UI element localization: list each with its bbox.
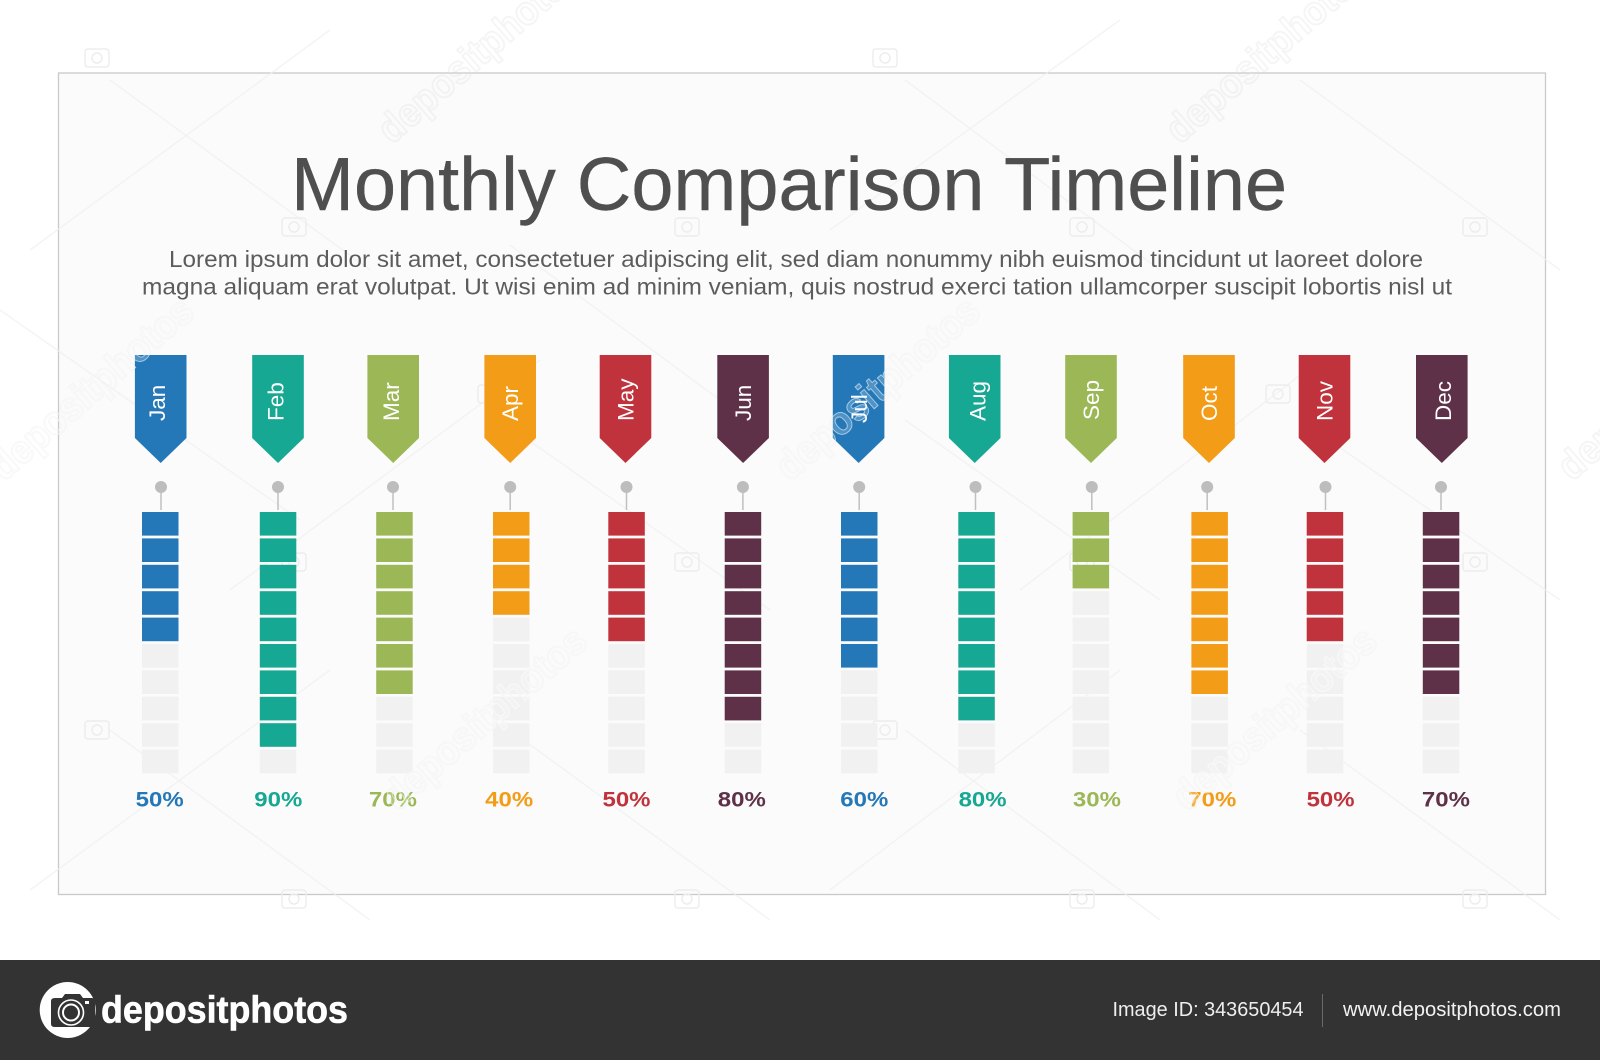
column: January 50% xyxy=(135,355,186,812)
value: Oct: 70% xyxy=(1188,788,1237,812)
pin: Mar xyxy=(387,481,399,510)
flag: Jul: Jul xyxy=(847,394,872,423)
column: June 80% xyxy=(717,355,769,812)
text: depositphotos xyxy=(1164,618,1385,819)
flag: Sep: Sep xyxy=(1079,380,1104,420)
flag: Jan: Jan xyxy=(145,385,170,421)
flag: Jul xyxy=(833,355,884,463)
value: Jun: 80% xyxy=(718,788,766,812)
value: Mar: 70% xyxy=(369,788,417,812)
value: Nov: 50% xyxy=(1307,788,1355,812)
flag: Nov xyxy=(1299,355,1350,463)
flag: Aug xyxy=(949,355,1000,463)
column: May 50% xyxy=(600,355,651,812)
flag: Mar xyxy=(367,355,419,463)
bar: Oct xyxy=(1191,512,1228,773)
pin: Nov xyxy=(1320,481,1332,510)
flag: Feb xyxy=(252,355,304,463)
column: February 90% xyxy=(252,355,304,812)
pin: Jan xyxy=(155,481,167,510)
pin: Jun xyxy=(737,481,749,510)
bar: Sep xyxy=(1073,512,1109,773)
text: depositphotos xyxy=(767,288,988,489)
flag: Dec: Dec xyxy=(1431,381,1456,421)
column: October 70% xyxy=(1183,355,1237,812)
flag: Nov: Nov xyxy=(1312,380,1338,421)
flag: Oct: Oct xyxy=(1197,385,1222,421)
flag: Jun: Jun xyxy=(731,385,756,421)
flag: Mar: Mar xyxy=(379,382,404,421)
text block: intro: magna aliquam erat volutpat. Ut wisi enim ad minim veniam, quis nostrud exerci tation ullamcorper suscipit lobortis nisl ut xyxy=(142,274,1453,300)
bar: May xyxy=(608,512,645,773)
text: depositphotos xyxy=(767,288,988,489)
flag: Sep xyxy=(1065,355,1117,463)
bar: Feb xyxy=(260,512,296,773)
pin: Oct xyxy=(1201,481,1213,510)
bar: Jun xyxy=(725,512,761,773)
pin: Sep xyxy=(1086,481,1098,510)
bar: Mar xyxy=(376,512,413,773)
value: Aug: 80% xyxy=(959,788,1007,812)
flag: Feb: Feb xyxy=(264,382,288,421)
panel: main card xyxy=(58,73,1546,894)
flag: Apr: Apr xyxy=(498,385,523,421)
text: depositphotos xyxy=(374,618,595,819)
bar: Dec xyxy=(1423,512,1459,773)
value: Sep: 30% xyxy=(1073,788,1121,812)
bar: Jan xyxy=(142,512,178,773)
flag: Jun xyxy=(717,355,769,463)
pin: Dec xyxy=(1435,481,1447,510)
value: Dec: 70% xyxy=(1422,788,1470,812)
value: Jul: 60% xyxy=(840,788,889,812)
flag: Jan xyxy=(135,355,186,463)
value: May: 50% xyxy=(602,788,651,812)
logo wordmark: depositphotos xyxy=(101,990,348,1032)
pin: Feb xyxy=(272,481,284,510)
column: November 50% xyxy=(1299,355,1355,812)
pin: Apr xyxy=(504,481,516,510)
bar: Apr xyxy=(493,512,530,773)
footer band xyxy=(0,960,1600,1060)
text: depositphotos xyxy=(374,618,595,819)
pin: Aug xyxy=(970,481,982,510)
image id: Image ID: 343650454 xyxy=(1112,999,1304,1021)
column: August 80% xyxy=(949,355,1007,812)
title: Monthly Comparison Timeline xyxy=(291,142,1287,226)
value: Feb: 90% xyxy=(254,788,303,812)
flag: May xyxy=(600,355,651,463)
bar: Nov xyxy=(1307,512,1343,773)
bar: Jul xyxy=(841,512,878,773)
bar: Aug xyxy=(958,512,995,773)
text: depositphotos xyxy=(1164,618,1385,819)
text block: intro: Lorem ipsum dolor sit amet, consectetuer adipiscing elit, sed diam nonummy nibh euismod tincidunt ut laoreet dolore xyxy=(169,246,1423,272)
column: December 70% xyxy=(1416,355,1470,812)
value: Jan: 50% xyxy=(136,788,184,812)
column: April 40% xyxy=(484,355,536,812)
flag: Oct xyxy=(1183,355,1235,463)
flag: Dec xyxy=(1416,355,1468,463)
flag: May: May xyxy=(614,378,638,421)
column: March 70% xyxy=(367,355,419,812)
flag: Apr xyxy=(484,355,536,463)
column: September 30% xyxy=(1065,355,1121,812)
website url: www.depositphotos.com xyxy=(1342,999,1561,1021)
value: Apr: 40% xyxy=(485,788,534,812)
text block: intro xyxy=(142,246,1453,300)
flag: Aug: Aug xyxy=(966,381,990,421)
column: July 60% xyxy=(833,355,889,812)
icon: camera logo xyxy=(40,982,96,1038)
pin: May xyxy=(620,481,632,510)
pin: Jul xyxy=(853,481,865,510)
